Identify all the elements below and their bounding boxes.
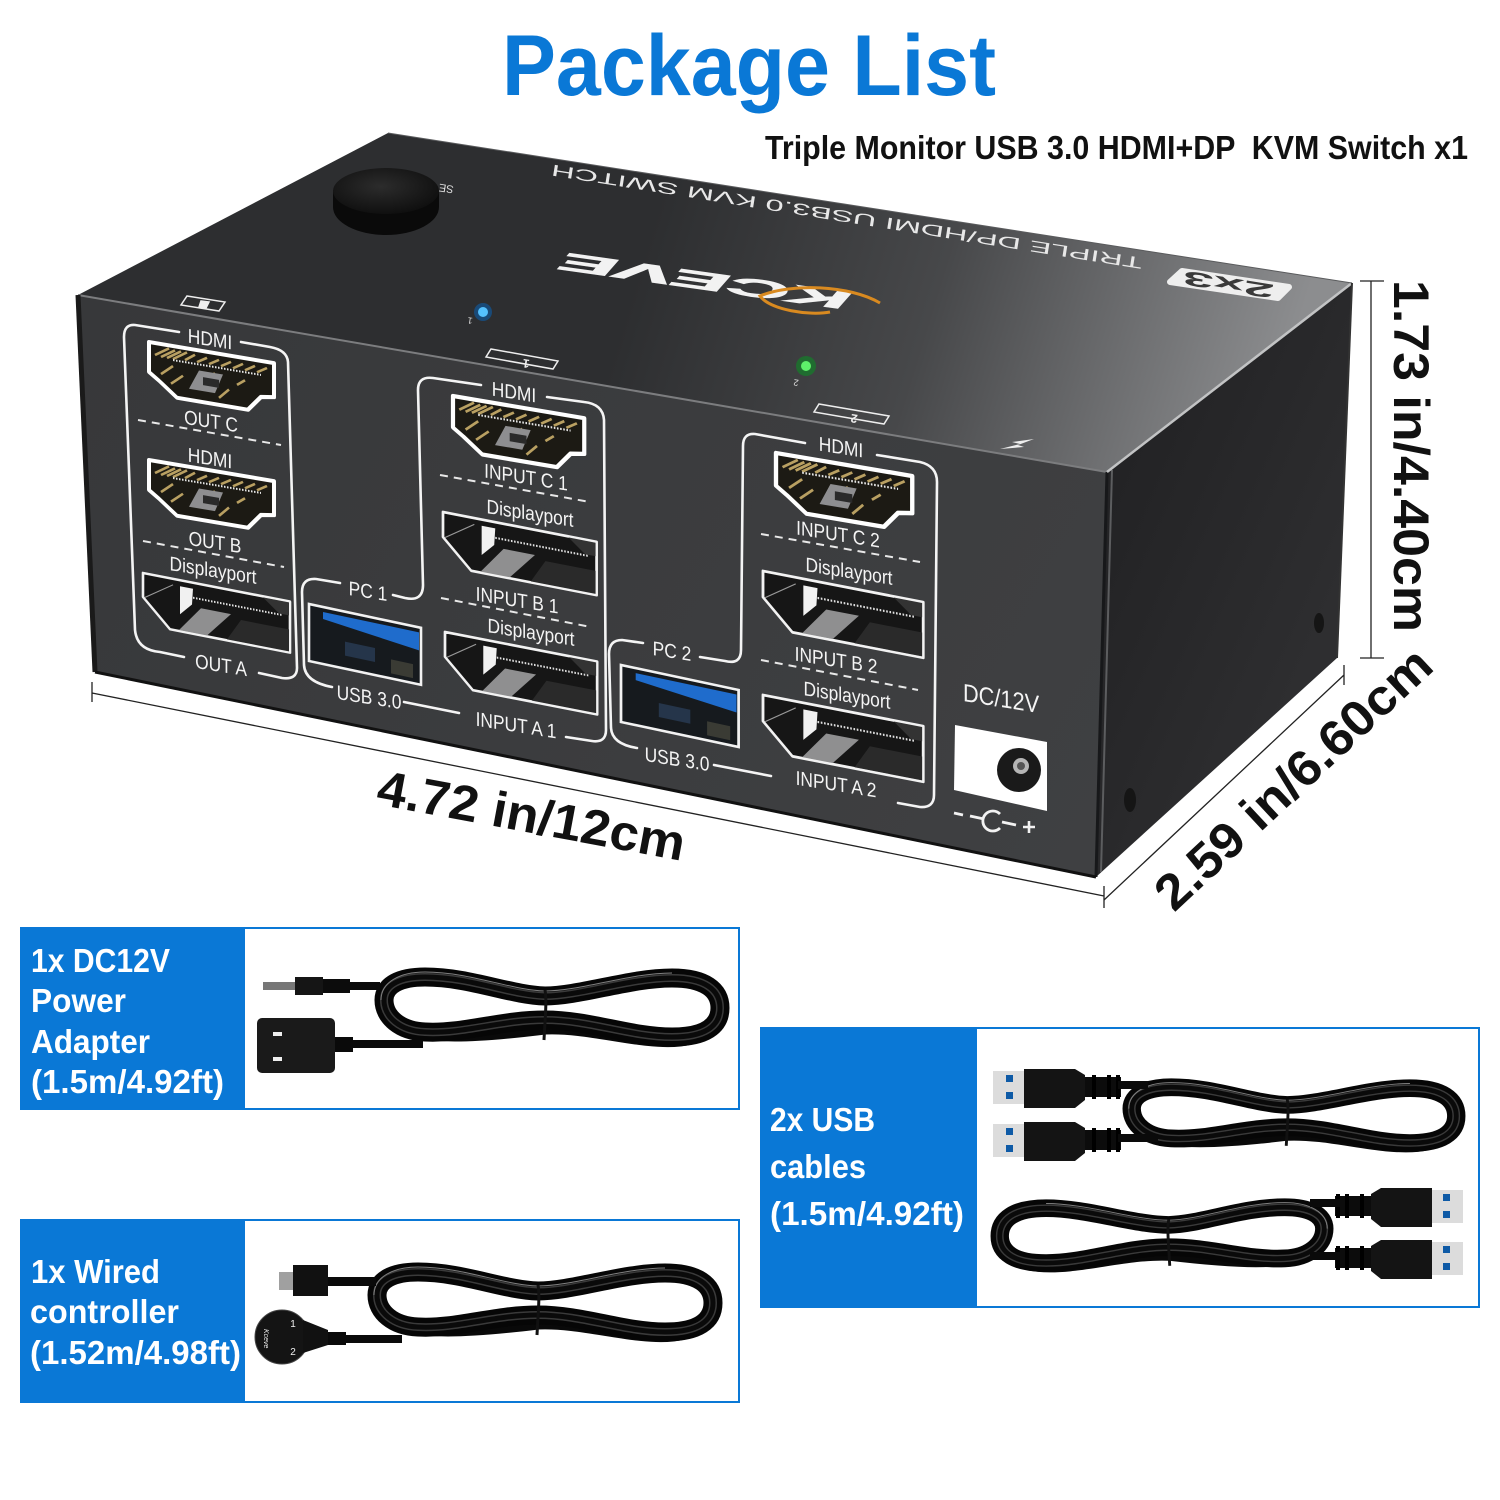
icon: monitor output: [181, 296, 225, 311]
port group: output: [124, 324, 297, 680]
port group: PC 2: INPUT B 2: [795, 642, 877, 678]
power adapter label: Power: [31, 982, 126, 1019]
screw lower: [1124, 788, 1136, 812]
wired controller cable: 2: [290, 1347, 296, 1358]
panel: USB cables: [760, 1027, 1479, 1308]
panel: wired controller: [20, 1219, 739, 1403]
port group: PC 2: INPUT A 2: [796, 767, 876, 802]
front face: [78, 295, 1107, 877]
port group: PC 2: Displayport: [806, 553, 893, 589]
icon: PC 1: [486, 349, 558, 371]
dimension: height: [1360, 280, 1439, 658]
wired controller cable: Kceve: [262, 1329, 269, 1349]
wired controller label: 1x Wired: [31, 1253, 160, 1290]
title: Package List: [502, 18, 996, 114]
port group: PC 1: INPUT A 1: [476, 708, 556, 743]
port group: output: HDMI: [188, 324, 232, 354]
product name on lid: TRIPLE DP/HDMI USB3.0 KVM SWITCH: [550, 161, 1144, 271]
wired controller label: [30, 1253, 241, 1371]
right side face: [1096, 283, 1352, 877]
DisplayPort: INPUT B1: [443, 512, 597, 595]
port group: PC 1: USB 3.0: [337, 681, 401, 713]
port group: PC 2: PC 2: [653, 637, 691, 665]
port group: PC 1: Displayport: [488, 614, 575, 650]
dimension: width: [92, 682, 1104, 908]
port group: PC 2: Displayport: [804, 677, 891, 713]
port group: PC 1: [302, 377, 606, 743]
USB cable set 2: [1000, 1188, 1463, 1279]
2x3 badge: 2x3: [1181, 266, 1276, 302]
port group: PC 2: HDMI: [819, 432, 863, 462]
port group: PC 2: [609, 432, 937, 807]
screw upper: [1314, 613, 1324, 633]
HDMI port: INPUT C2: [776, 453, 912, 532]
power adapter label: Adapter: [31, 1023, 150, 1060]
wired controller label: (1.52m/4.98ft): [30, 1334, 241, 1371]
port group: output: HDMI: [188, 443, 232, 473]
dimension: height: 1.73 in/4.40cm: [1383, 280, 1439, 632]
DC power jack: [954, 679, 1047, 833]
green LED 2: [793, 356, 816, 388]
port group: output: OUT B: [189, 527, 241, 557]
port group: PC 1: INPUT C 1: [484, 459, 568, 495]
port group: output: Displayport: [170, 552, 257, 588]
dimension: depth: 2.59 in/6.60cm: [1143, 636, 1443, 921]
icon: PC 2: 2: [849, 411, 858, 426]
USB cables label: 2x USB: [770, 1101, 875, 1138]
KCEVE logo: KCEVE: [555, 246, 853, 315]
port group: PC 2: USB 3.0: [645, 743, 709, 775]
blue LED 1: 1: [467, 315, 473, 326]
icon: PC 2: [814, 404, 889, 426]
KCEVE logo: [555, 246, 880, 315]
power adapter label: 1x DC12V: [31, 942, 170, 979]
top face: [78, 133, 1352, 472]
port group: PC 1: Displayport: [487, 495, 574, 531]
DisplayPort: INPUT A2: [763, 695, 923, 782]
switch knob: SE: [438, 181, 454, 195]
HDMI port: OUT C: [149, 342, 274, 414]
USB cables label: [770, 1101, 964, 1232]
USB port: PC 1: [309, 604, 421, 685]
USB cables label: cables: [770, 1148, 866, 1185]
wired controller cable: 1: [290, 1319, 296, 1330]
wired controller cable: [255, 1265, 713, 1364]
DC power jack: DC/12V: [963, 679, 1039, 718]
port group: PC 2: INPUT C 2: [796, 516, 880, 552]
icon: power bolt: [1000, 439, 1034, 449]
power adapter label: (1.5m/4.92ft): [31, 1063, 224, 1100]
2x3 badge: [1170, 266, 1289, 302]
wired controller label: controller: [30, 1293, 179, 1330]
DisplayPort: INPUT B2: [763, 571, 923, 658]
icon: PC 1: 1: [521, 356, 530, 371]
dimension: width: 4.72 in/12cm: [373, 760, 690, 872]
power adapter label: [31, 942, 224, 1100]
port group: output: OUT C: [184, 406, 238, 437]
KVM switch product: [78, 133, 1352, 877]
HDMI port: INPUT C1: [453, 396, 584, 472]
port group: PC 1: PC 1: [349, 577, 387, 605]
green LED 2: 2: [793, 377, 799, 388]
USB port: PC 2: [621, 665, 739, 747]
blue LED 1: [467, 303, 492, 326]
switch knob: [333, 168, 454, 235]
USB cable set 1: [993, 1069, 1456, 1161]
HDMI port: OUT B: [149, 460, 274, 532]
panel: power adapter: [20, 927, 739, 1110]
port group: output: OUT A: [195, 650, 247, 680]
DisplayPort: OUT A: [143, 573, 290, 653]
port group: PC 1: HDMI: [492, 377, 536, 407]
DisplayPort: INPUT A1: [445, 632, 597, 714]
power adapter cable: [257, 972, 720, 1073]
USB cables label: (1.5m/4.92ft): [770, 1195, 964, 1232]
port group: PC 1: INPUT B 1: [476, 582, 558, 618]
